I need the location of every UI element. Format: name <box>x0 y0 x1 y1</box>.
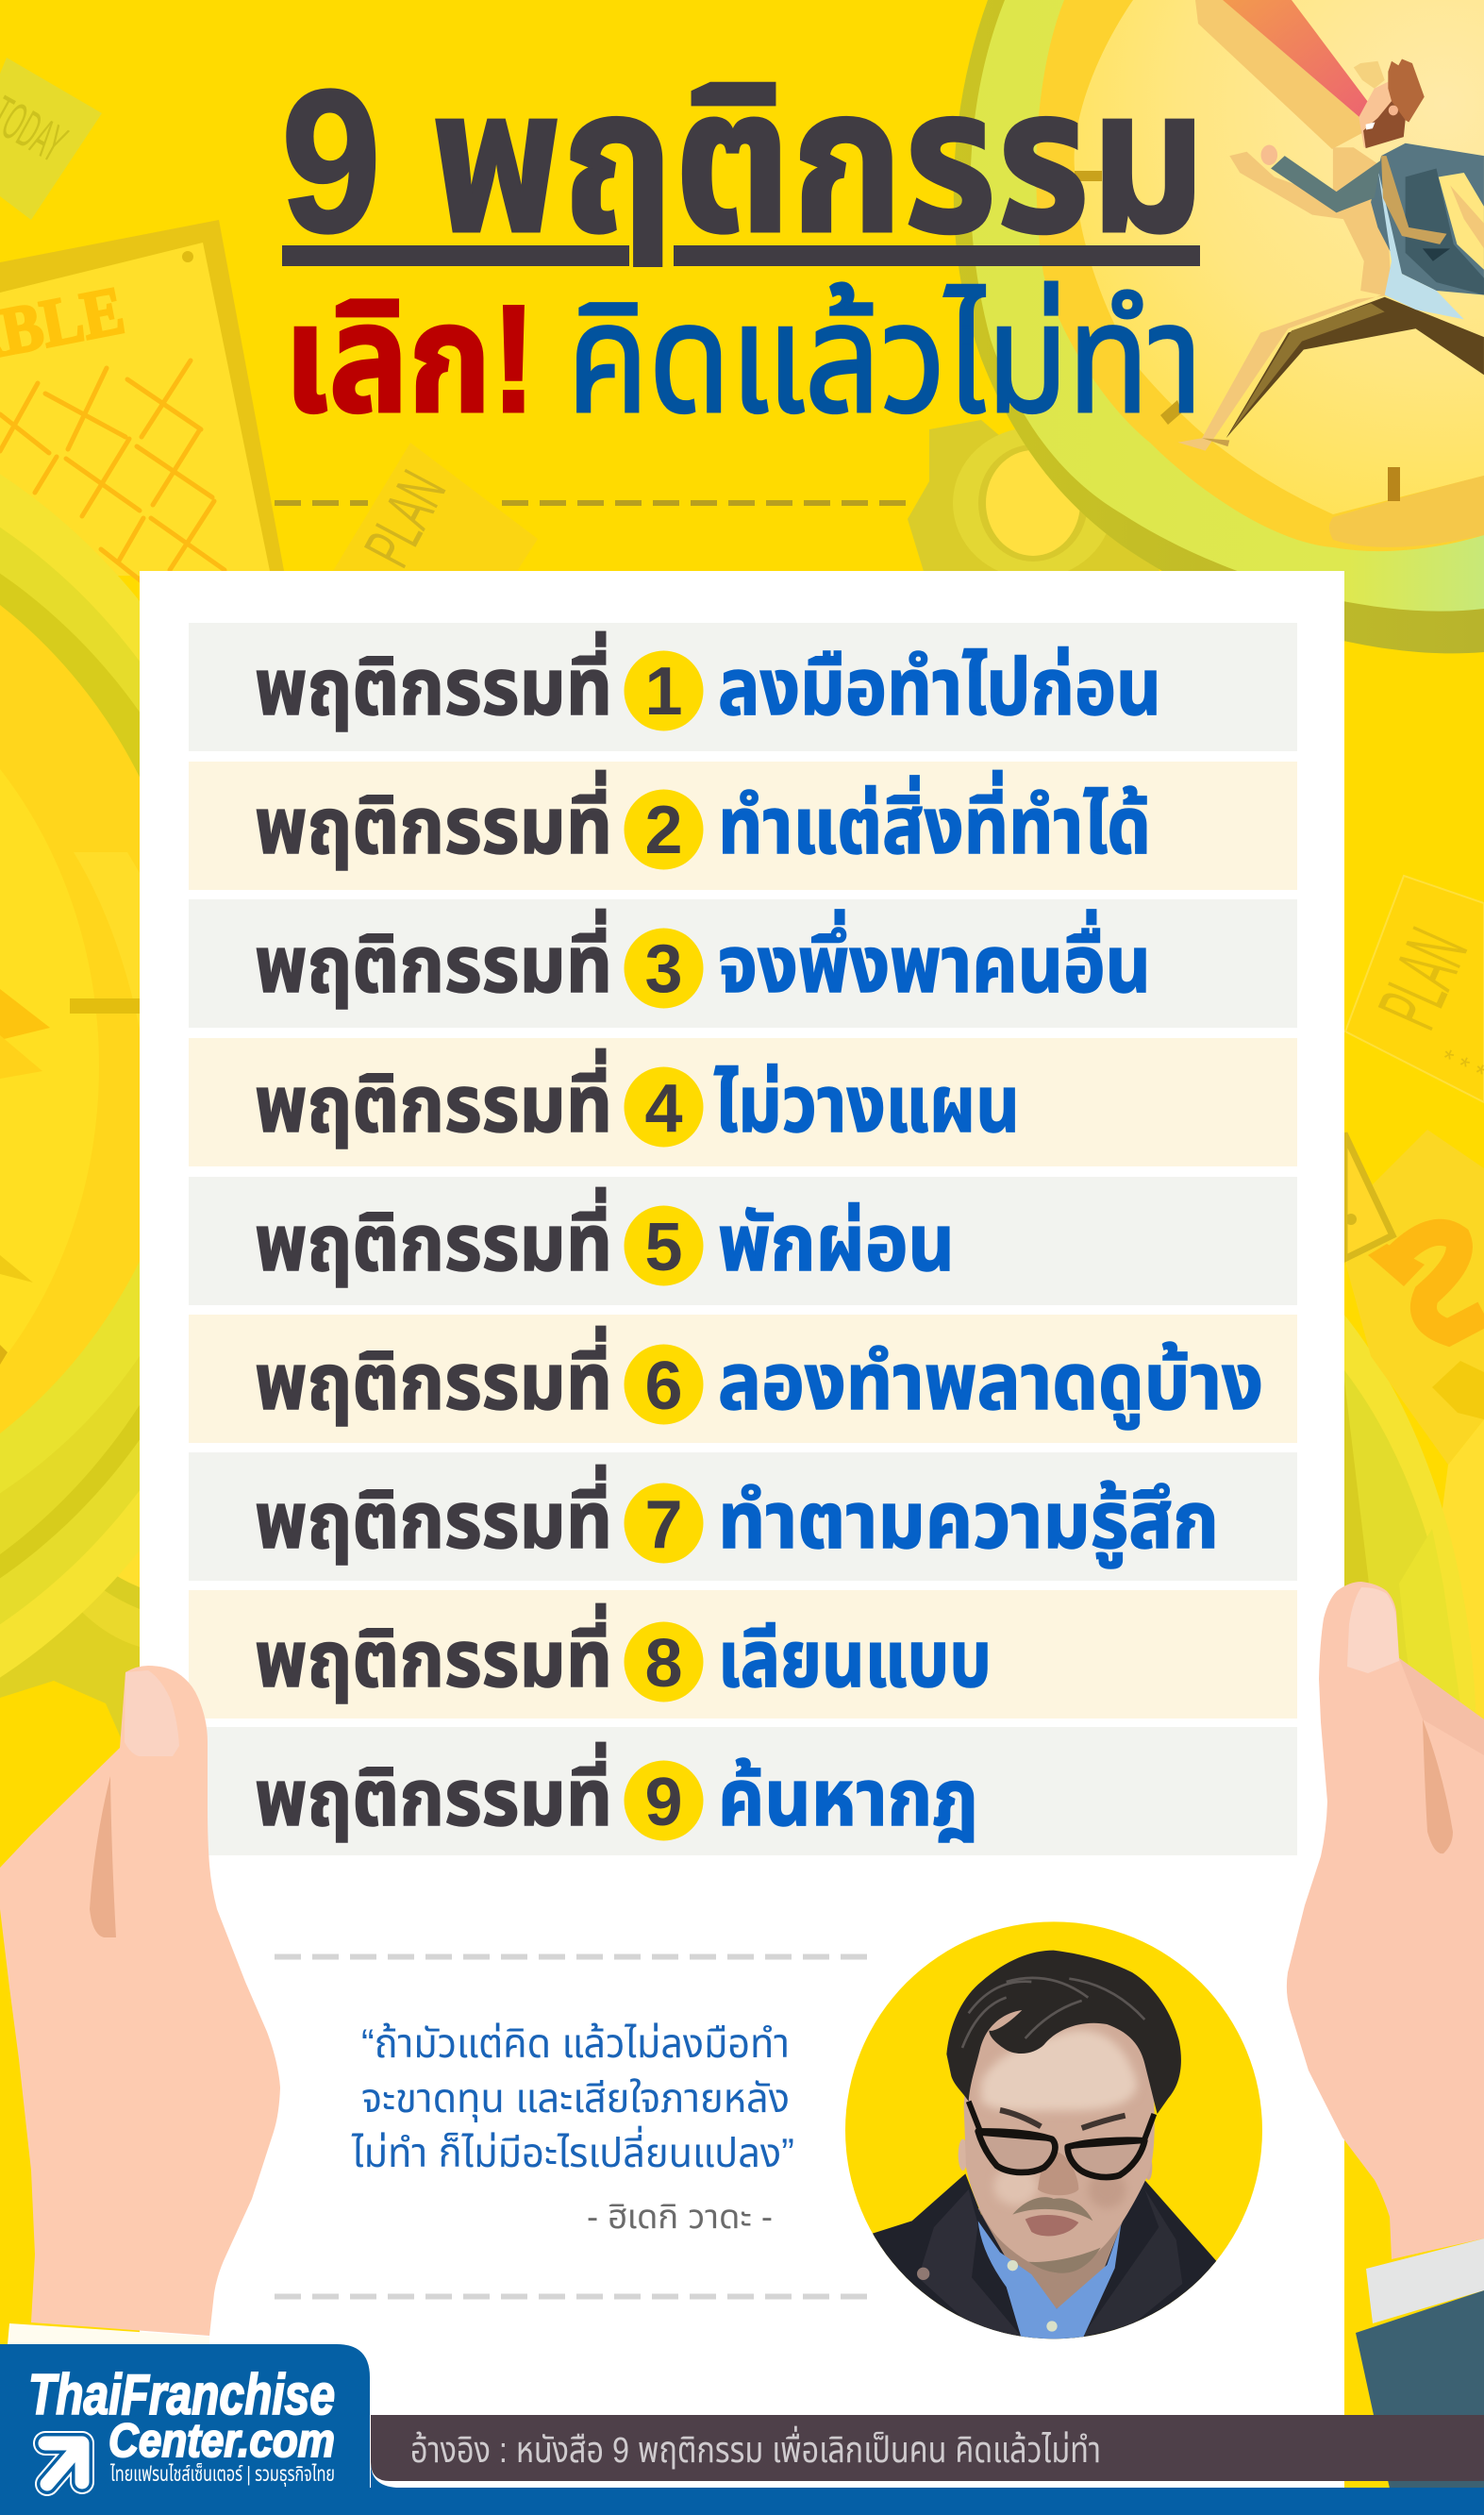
logo text: ThaiFranchise <box>28 2363 335 2426</box>
man foot <box>1202 438 1229 446</box>
quote: จะขาดทุน และเสียใจภายหลัง <box>361 2076 790 2122</box>
row 4: 4 <box>644 1071 683 1147</box>
man lower leg light <box>1229 303 1385 434</box>
man jacket <box>1371 143 1484 294</box>
paper panel <box>140 571 1344 2488</box>
row 6 <box>189 1315 1297 1443</box>
left clock <box>0 474 140 1737</box>
row 2: พฤติกรรมที่ <box>255 770 612 870</box>
row 8: พฤติกรรมที่ <box>255 1603 612 1703</box>
right sleeve <box>1356 2290 1484 2489</box>
row 7: ทำตามความรู้สึก <box>718 1476 1219 1568</box>
portrait jacket <box>873 2173 1217 2347</box>
row 2 <box>189 762 1297 890</box>
row 1: 1 <box>644 654 683 729</box>
logo badge <box>0 2344 396 2515</box>
note: today <box>0 58 102 220</box>
title blue words: คิดแล้วไม่ทำ <box>567 274 1203 444</box>
portrait chin <box>1028 2248 1101 2273</box>
row 9 <box>189 1727 1297 1855</box>
behaviour list <box>189 623 1297 1855</box>
logo badge: ไทยแฟรนไชส์เซ็นเตอร์ | รวมธุรกิจไทย <box>109 2462 335 2487</box>
man hair shadow <box>1354 61 1385 89</box>
row 1 <box>189 623 1297 751</box>
left thumb nail <box>125 1670 179 1756</box>
man hair <box>1388 59 1425 122</box>
man pocket <box>1423 248 1450 261</box>
running man <box>1177 59 1484 451</box>
man beard <box>1363 101 1406 148</box>
row 8 <box>189 1590 1297 1719</box>
portrait ears <box>959 2138 966 2171</box>
row 2: 2 <box>644 793 683 868</box>
source strip <box>371 2415 1484 2481</box>
title underline <box>282 245 1200 266</box>
portrait cheek light <box>993 2168 1038 2205</box>
right thumb nail <box>1347 1587 1399 1673</box>
portrait <box>845 1921 1262 2347</box>
quote <box>351 2021 794 2236</box>
portrait eyebrows <box>1000 2110 1126 2128</box>
row 9: พฤติกรรมที่ <box>255 1742 612 1842</box>
row 3 <box>189 899 1297 1028</box>
row 5: พฤติกรรมที่ <box>255 1187 612 1287</box>
title line one: 9 พฤติกรรม <box>281 47 1206 275</box>
note: plan top <box>330 443 538 578</box>
title <box>282 81 1200 415</box>
portrait shirt <box>978 2221 1121 2340</box>
left crease <box>90 1776 116 1937</box>
portrait hair <box>946 1951 1181 2114</box>
top dashes <box>275 500 909 506</box>
row 1: พฤติกรรมที่ <box>255 631 612 731</box>
row 3: 3 <box>644 931 683 1007</box>
portrait neck <box>978 2205 1129 2309</box>
right side notes and clock <box>788 876 1484 2293</box>
portrait hair highlights <box>962 1978 1144 2048</box>
quote dashes <box>275 1957 869 2297</box>
row 8: เลียนแบบ <box>718 1615 992 1703</box>
row 7: 7 <box>644 1487 683 1563</box>
row 7: พฤติกรรมที่ <box>255 1465 612 1565</box>
portrait face <box>964 1988 1155 2273</box>
right crease <box>1423 1719 1453 1853</box>
row 1: ลงมือทำไปก่อน <box>718 643 1161 731</box>
man legs <box>1226 297 1484 438</box>
note: plan top: PLAN <box>350 460 459 578</box>
note: orange arrow <box>1344 1130 1484 1465</box>
footer bar <box>0 2415 1484 2515</box>
row 6: พฤติกรรมที่ <box>255 1326 612 1426</box>
row 5: 5 <box>644 1210 683 1285</box>
note: plan right <box>1345 876 1484 1102</box>
row 7 <box>189 1452 1297 1581</box>
logo arrow <box>45 2443 82 2484</box>
row 3: พฤติกรรมที่ <box>255 909 612 1009</box>
row 9: ค้นหากฎ <box>718 1753 978 1842</box>
row 4: ไม่วางแผน <box>714 1060 1020 1149</box>
row 6: 6 <box>644 1349 683 1424</box>
row 8: 8 <box>644 1626 683 1702</box>
man hand <box>1261 145 1277 165</box>
portrait nose <box>1038 2152 1078 2195</box>
right shade <box>1399 1658 1484 1755</box>
row 4: พฤติกรรมที่ <box>255 1048 612 1149</box>
left hand <box>0 1666 280 2344</box>
calendar <box>0 220 285 581</box>
man arm <box>1271 156 1381 212</box>
right cuff <box>1366 2238 1484 2323</box>
portrait buttons <box>1008 2260 1018 2271</box>
row 5: พักผ่อน <box>718 1199 955 1287</box>
title red word: เลิก! <box>284 274 536 444</box>
left cuff <box>8 2323 209 2344</box>
logo badge: Center.com <box>108 2414 335 2467</box>
top right clock <box>954 0 1484 653</box>
row 2: ทำแต่สิ่งที่ทำได้ <box>718 770 1151 870</box>
row 9: 9 <box>644 1765 683 1840</box>
yellow gear corner <box>0 1681 123 1878</box>
quote: “ถ้ามัวแต่คิด แล้วไม่ลงมือทำ <box>361 2021 790 2067</box>
man shadow <box>1177 147 1392 451</box>
row 3: จงพึ่งพาคนอื่น <box>718 909 1151 1009</box>
source text: อ้างอิง : หนังสือ 9 พฤติกรรม เพื่อเลิกเป็นคน คิดแล้วไม่ทำ <box>410 2425 1101 2471</box>
portrait moustache <box>1012 2197 1092 2221</box>
gear <box>908 420 1160 604</box>
man face <box>1359 80 1406 147</box>
row 4 <box>189 1038 1297 1166</box>
row 5 <box>189 1177 1297 1305</box>
quote author: - ฮิเดกิ วาดะ - <box>587 2197 773 2236</box>
quote: ไม่ทำ ก็ไม่มีอะไรเปลี่ยนแปลง” <box>351 2125 794 2176</box>
row 6: ลองทำพลาดดูบ้าง <box>718 1337 1263 1430</box>
portrait glasses <box>978 2131 1144 2177</box>
man shirt <box>1377 169 1464 319</box>
portrait mouth <box>1025 2215 1078 2236</box>
man tie <box>1381 156 1446 244</box>
right hand <box>1287 1582 1484 2489</box>
portrait forehead <box>981 2030 1137 2111</box>
